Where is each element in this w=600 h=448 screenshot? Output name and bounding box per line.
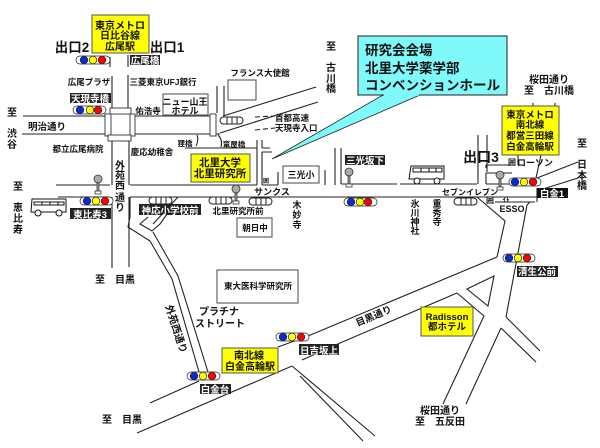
building: New Sanno hotel: ホテル	[171, 106, 199, 116]
station box: Shirokane-Takanawa north: 東京メトロ	[506, 109, 554, 121]
exit labels	[55, 40, 499, 165]
exit labels: 出口1	[150, 40, 185, 55]
intersection label chips: 三光坂下	[346, 155, 384, 167]
place labels: ESSO	[499, 204, 525, 214]
vertical labels: 秀	[432, 207, 442, 218]
place labels: プラチナ	[199, 306, 239, 318]
place labels: サンクス	[254, 187, 290, 197]
vertical labels: 木	[292, 199, 302, 210]
hotel box: Radisson: Radisson	[426, 312, 469, 323]
vertical labels: 恵	[13, 201, 23, 214]
callout: venue: 北里大学薬学部	[365, 60, 460, 76]
station box: Namboku line: 南北線	[234, 349, 264, 362]
traffic signals	[73, 56, 541, 380]
vertical labels: 寺	[292, 219, 302, 230]
vertical labels: 寿	[13, 223, 23, 236]
station box: Hiroo: 広尾駅	[105, 41, 135, 53]
place labels: 狸橋	[178, 138, 193, 148]
building: IMSUT: 東大医科学研究所	[224, 281, 292, 291]
vertical labels: 至	[577, 138, 587, 150]
station box: Kitasato	[191, 154, 250, 182]
place labels: 囲	[508, 158, 516, 167]
intersection label chips: 天現寺橋	[71, 93, 109, 105]
overpass structures	[105, 108, 216, 141]
vertical labels: 西	[115, 180, 125, 192]
station box: Hiroo	[92, 15, 149, 53]
hotel box: Radisson: 都ホテル	[428, 321, 466, 333]
station box: Shirokane-Takanawa north	[502, 106, 559, 155]
place labels: ｲﾄ	[502, 197, 510, 204]
station box: Namboku line	[222, 348, 278, 373]
place labels: セブンイレブン	[442, 187, 498, 197]
vertical labels	[7, 41, 587, 236]
station box: Shirokane-Takanawa north: 都営三田線	[506, 130, 554, 142]
building: New Sanno hotel: ニュー山王	[162, 97, 208, 107]
intersection label chips: 神応小学校前	[141, 205, 199, 217]
rotated road labels	[162, 303, 394, 355]
small empty signals	[149, 117, 477, 205]
vertical labels: 至	[13, 181, 23, 193]
place labels: 天現寺入口	[275, 123, 318, 133]
vertical labels: 比	[13, 212, 23, 225]
vertical labels: 神	[410, 216, 420, 227]
station box: Hiroo: 日比谷線	[100, 29, 140, 42]
building: Asahi junior high	[237, 218, 272, 237]
vertical labels: 谷	[7, 139, 17, 151]
place labels	[28, 68, 553, 330]
place labels: ローソン	[517, 158, 553, 168]
place labels: 囲	[486, 196, 494, 205]
vertical labels: 橋	[326, 82, 336, 95]
direction labels	[95, 73, 574, 428]
station box: Kitasato: 北里研究所	[194, 167, 247, 180]
direction labels: 至 目黒	[102, 414, 142, 426]
rotated road labels: 目黒通り	[354, 304, 394, 329]
place labels: 首都高速	[275, 113, 310, 123]
building: Sanko elementary: 三光小	[287, 169, 315, 180]
place labels: 佑浩寺	[135, 106, 161, 116]
vertical labels: 妙	[292, 209, 302, 220]
exit labels: 出口3	[463, 149, 499, 165]
place labels: 慶応幼稚舎	[131, 147, 174, 157]
callout: venue: コンベンションホール	[365, 78, 500, 93]
direction labels: 至 目黒	[95, 274, 135, 286]
vertical labels: 川	[326, 74, 336, 85]
place labels: 広尾プラザ	[68, 77, 111, 87]
vertical labels: 重	[432, 198, 442, 209]
vertical labels: 社	[410, 225, 420, 236]
vertical labels: 通	[115, 191, 125, 204]
intersection label chips: 広尾橋	[131, 55, 160, 67]
vertical labels: 日	[577, 159, 587, 171]
intersection label chips	[70, 55, 568, 396]
vertical labels: 外	[115, 159, 125, 172]
building: France embassy	[228, 80, 256, 100]
callout: venue	[272, 36, 507, 159]
place labels: 都立広尾病院	[52, 144, 104, 154]
exit labels: 出口2	[55, 40, 89, 55]
building: Sanko elementary	[283, 166, 319, 183]
bus icons	[31, 166, 444, 216]
vertical labels: 苑	[115, 169, 125, 182]
station box: Namboku line: 白金高輪駅	[225, 360, 275, 373]
place labels: 北里研究所前	[212, 206, 264, 216]
station box: Kitasato: 北里大学	[199, 156, 241, 169]
place labels: フランス大使館	[230, 68, 290, 78]
vertical labels: 寺	[432, 216, 442, 227]
vertical labels: 至	[326, 41, 336, 53]
intersection label chips: 東比寿3	[73, 209, 107, 221]
hotel box: Radisson	[421, 307, 473, 336]
station box: Shirokane-Takanawa north: 白金高輪駅	[506, 141, 554, 153]
callout: venue: 研究会会場	[365, 42, 433, 58]
vertical labels: り	[115, 202, 125, 214]
place labels: ストリート	[195, 318, 245, 330]
building: New Sanno hotel	[162, 94, 208, 116]
vertical labels: 古	[326, 61, 336, 74]
intersection label chips: 日吉坂上	[300, 345, 338, 357]
vertical labels: 橋	[577, 179, 587, 192]
vertical labels: 本	[577, 169, 587, 182]
building: Asahi junior high: 朝日中	[242, 223, 268, 233]
place labels: 竃屋橋	[223, 139, 246, 149]
intersection label chips: 清生公前	[518, 266, 556, 278]
place labels: 明治通り	[28, 121, 66, 133]
intersection label chips: 白金1	[540, 188, 565, 200]
place labels: 囲	[263, 178, 269, 185]
vertical labels: 川	[410, 208, 420, 218]
station box: Shirokane-Takanawa north: 南北線	[516, 119, 545, 131]
vertical labels: 至	[7, 107, 17, 119]
vertical labels: 渋	[7, 127, 17, 140]
rotated road labels: 外苑西通り	[162, 303, 190, 355]
station box: Hiroo: 東京メトロ	[95, 19, 145, 32]
direction labels: 至 古川橋	[524, 84, 574, 97]
intersection label chips: 白金台	[201, 384, 230, 396]
place labels: 三菱東京UFJ銀行	[129, 77, 197, 87]
street lamps	[94, 168, 504, 204]
vertical labels: 氷	[410, 198, 420, 209]
building: IMSUT	[217, 270, 298, 303]
direction labels: 桜田通り	[529, 73, 569, 86]
direction labels: 桜田通り	[420, 404, 460, 417]
direction labels: 至 五反田	[415, 416, 465, 428]
road network	[22, 55, 578, 441]
